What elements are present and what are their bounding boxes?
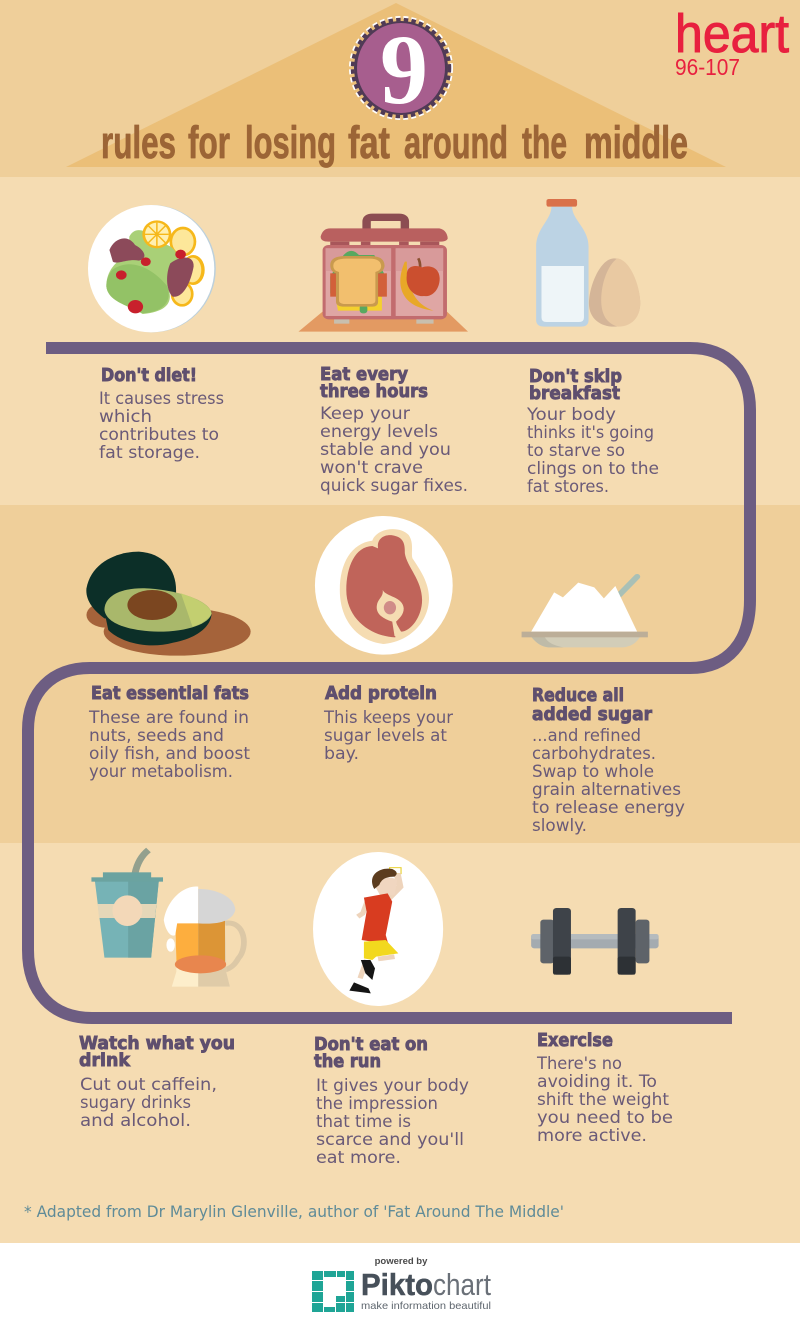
text: Reduce all added sugar: Swap to whole: [532, 762, 654, 782]
text: Don't eat on the run: Don't eat on: [314, 1034, 428, 1055]
footer: Piktochart logo: [312, 1256, 491, 1312]
text: Eat every three hours: won't crave: [320, 458, 423, 478]
text: Reduce all added sugar: slowly.: [532, 816, 587, 836]
text: Don't skip breakfast: Your body: [526, 405, 616, 425]
text: Reduce all added sugar: ...and refined: [532, 726, 641, 746]
text: Don't skip breakfast: clings on to the: [527, 459, 659, 479]
text: Eat essential fats: oily fish, and boost: [89, 744, 250, 764]
text: Exercise: Exercise: [537, 1030, 613, 1051]
text: Exercise: avoiding it. To: [537, 1072, 657, 1092]
text: Don't skip breakfast: [526, 366, 659, 497]
text: Reduce all added sugar: grain alternatives: [532, 780, 681, 800]
text: Don't eat on the run: eat more.: [316, 1148, 401, 1168]
text: Add protein: This keeps your: [323, 708, 453, 728]
text: Eat every three hours: quick sugar fixes.: [320, 476, 468, 496]
logo: heart 96-107: 96-107: [675, 54, 740, 80]
icon: lunchbox: [298, 217, 468, 332]
text: Add protein: bay.: [324, 744, 359, 764]
badge: number 9: 9: [380, 14, 428, 125]
text: Don't skip breakfast: breakfast: [529, 383, 620, 404]
text: Add protein: sugar levels at: [324, 726, 447, 746]
text: Eat every three hours: energy levels: [320, 422, 438, 442]
title: around: [404, 117, 508, 168]
text: Don't skip breakfast: to starve so: [527, 441, 625, 461]
text: Exercise: There's no: [536, 1054, 622, 1074]
text: Don't skip breakfast: Don't skip: [529, 366, 622, 387]
text: Exercise: you need to be: [537, 1108, 673, 1128]
winding path line: [28, 348, 750, 1018]
text: Eat every three hours: Eat every: [320, 364, 408, 385]
text: Don't eat on the run: [314, 1034, 469, 1168]
title: rules: [101, 117, 176, 168]
text: Eat every three hours: three hours: [320, 381, 428, 402]
text: Eat essential fats: your metabolism.: [89, 762, 233, 782]
text: Eat every three hours: stable and you: [320, 440, 451, 460]
text: Watch what you drink: drink: [79, 1050, 131, 1071]
icon: sugar bowl: [522, 577, 648, 647]
text: Reduce all added sugar: carbohydrates.: [532, 744, 656, 764]
text: Exercise: more active.: [537, 1126, 647, 1146]
text: Don't diet: contributes to: [99, 425, 219, 445]
icon: Piktochart grid: [312, 1271, 354, 1312]
icon: drink cup and beer: [91, 850, 244, 987]
footnote: * Adapted from Dr Marylin Glenville, author of 'Fat Around The Middle': [24, 1202, 564, 1221]
text: Don't diet: [99, 365, 224, 463]
text: Reduce all added sugar: added sugar: [532, 704, 652, 725]
title: fat: [348, 117, 390, 168]
text: Watch what you drink: and alcohol.: [80, 1111, 191, 1131]
text: Reduce all added sugar: [532, 685, 685, 836]
title: for: [188, 117, 230, 168]
footer: Piktochart logo: chart: [433, 1267, 491, 1302]
text: Exercise: [536, 1030, 673, 1146]
footer: Piktochart logo: Pikto: [361, 1267, 433, 1302]
text: Reduce all added sugar: to release energy: [532, 798, 685, 818]
text: Eat essential fats: nuts, seeds and: [89, 726, 224, 746]
text: Watch what you drink: sugary drinks: [80, 1093, 191, 1113]
text: Exercise: shift the weight: [537, 1090, 669, 1110]
text: Don't eat on the run: the impression: [316, 1094, 438, 1114]
logo: heart 96-107: heart: [675, 4, 789, 64]
icon: milk bottle and egg: [536, 199, 640, 327]
icon: avocado: [86, 552, 251, 656]
icon: running man: [313, 852, 443, 1006]
icon: dumbbell: [531, 908, 659, 975]
text: Don't eat on the run: that time is: [316, 1112, 411, 1132]
text: Don't eat on the run: scarce and you'll: [316, 1130, 464, 1150]
text: Watch what you drink: Cut out caffein,: [80, 1075, 217, 1095]
footer: Piktochart logo: make information beautiful: [361, 1300, 491, 1312]
header roof triangle: [66, 3, 726, 167]
icon: salad plate: [88, 205, 216, 332]
text: Reduce all added sugar: Reduce all: [532, 685, 624, 706]
text: Add protein: Add protein: [325, 683, 437, 704]
text: Eat essential fats: These are found in: [88, 708, 249, 728]
text: Don't eat on the run: It gives your body: [316, 1076, 469, 1096]
text: Don't diet: which: [99, 407, 152, 427]
footer: Piktochart logo: powered by: [375, 1256, 428, 1267]
icon: steak plate: [315, 516, 453, 655]
text: Eat essential fats: [88, 683, 250, 782]
text: Don't diet: Don't diet!: [101, 365, 197, 386]
title: losing: [245, 117, 336, 168]
title: the: [522, 117, 567, 168]
text: Add protein: [323, 683, 453, 764]
text: Eat essential fats: Eat essential fats: [91, 683, 249, 704]
sandwich: [330, 251, 387, 313]
title: [101, 117, 688, 168]
text: Don't skip breakfast: fat stores.: [527, 477, 609, 497]
text: Don't skip breakfast: thinks it's going: [527, 423, 654, 443]
text: Eat every three hours: Keep your: [320, 404, 410, 424]
text: Watch what you drink: Watch what you: [79, 1033, 235, 1054]
badge: number 9: [350, 14, 452, 125]
banana and apple: [400, 258, 440, 311]
text: Don't diet: It causes stress: [99, 389, 224, 409]
text: Don't eat on the run: the run: [314, 1051, 381, 1072]
title: middle: [584, 117, 688, 168]
text: Watch what you drink: [79, 1033, 235, 1131]
text: Don't diet: fat storage.: [99, 443, 200, 463]
text: Eat every three hours: [320, 364, 468, 496]
